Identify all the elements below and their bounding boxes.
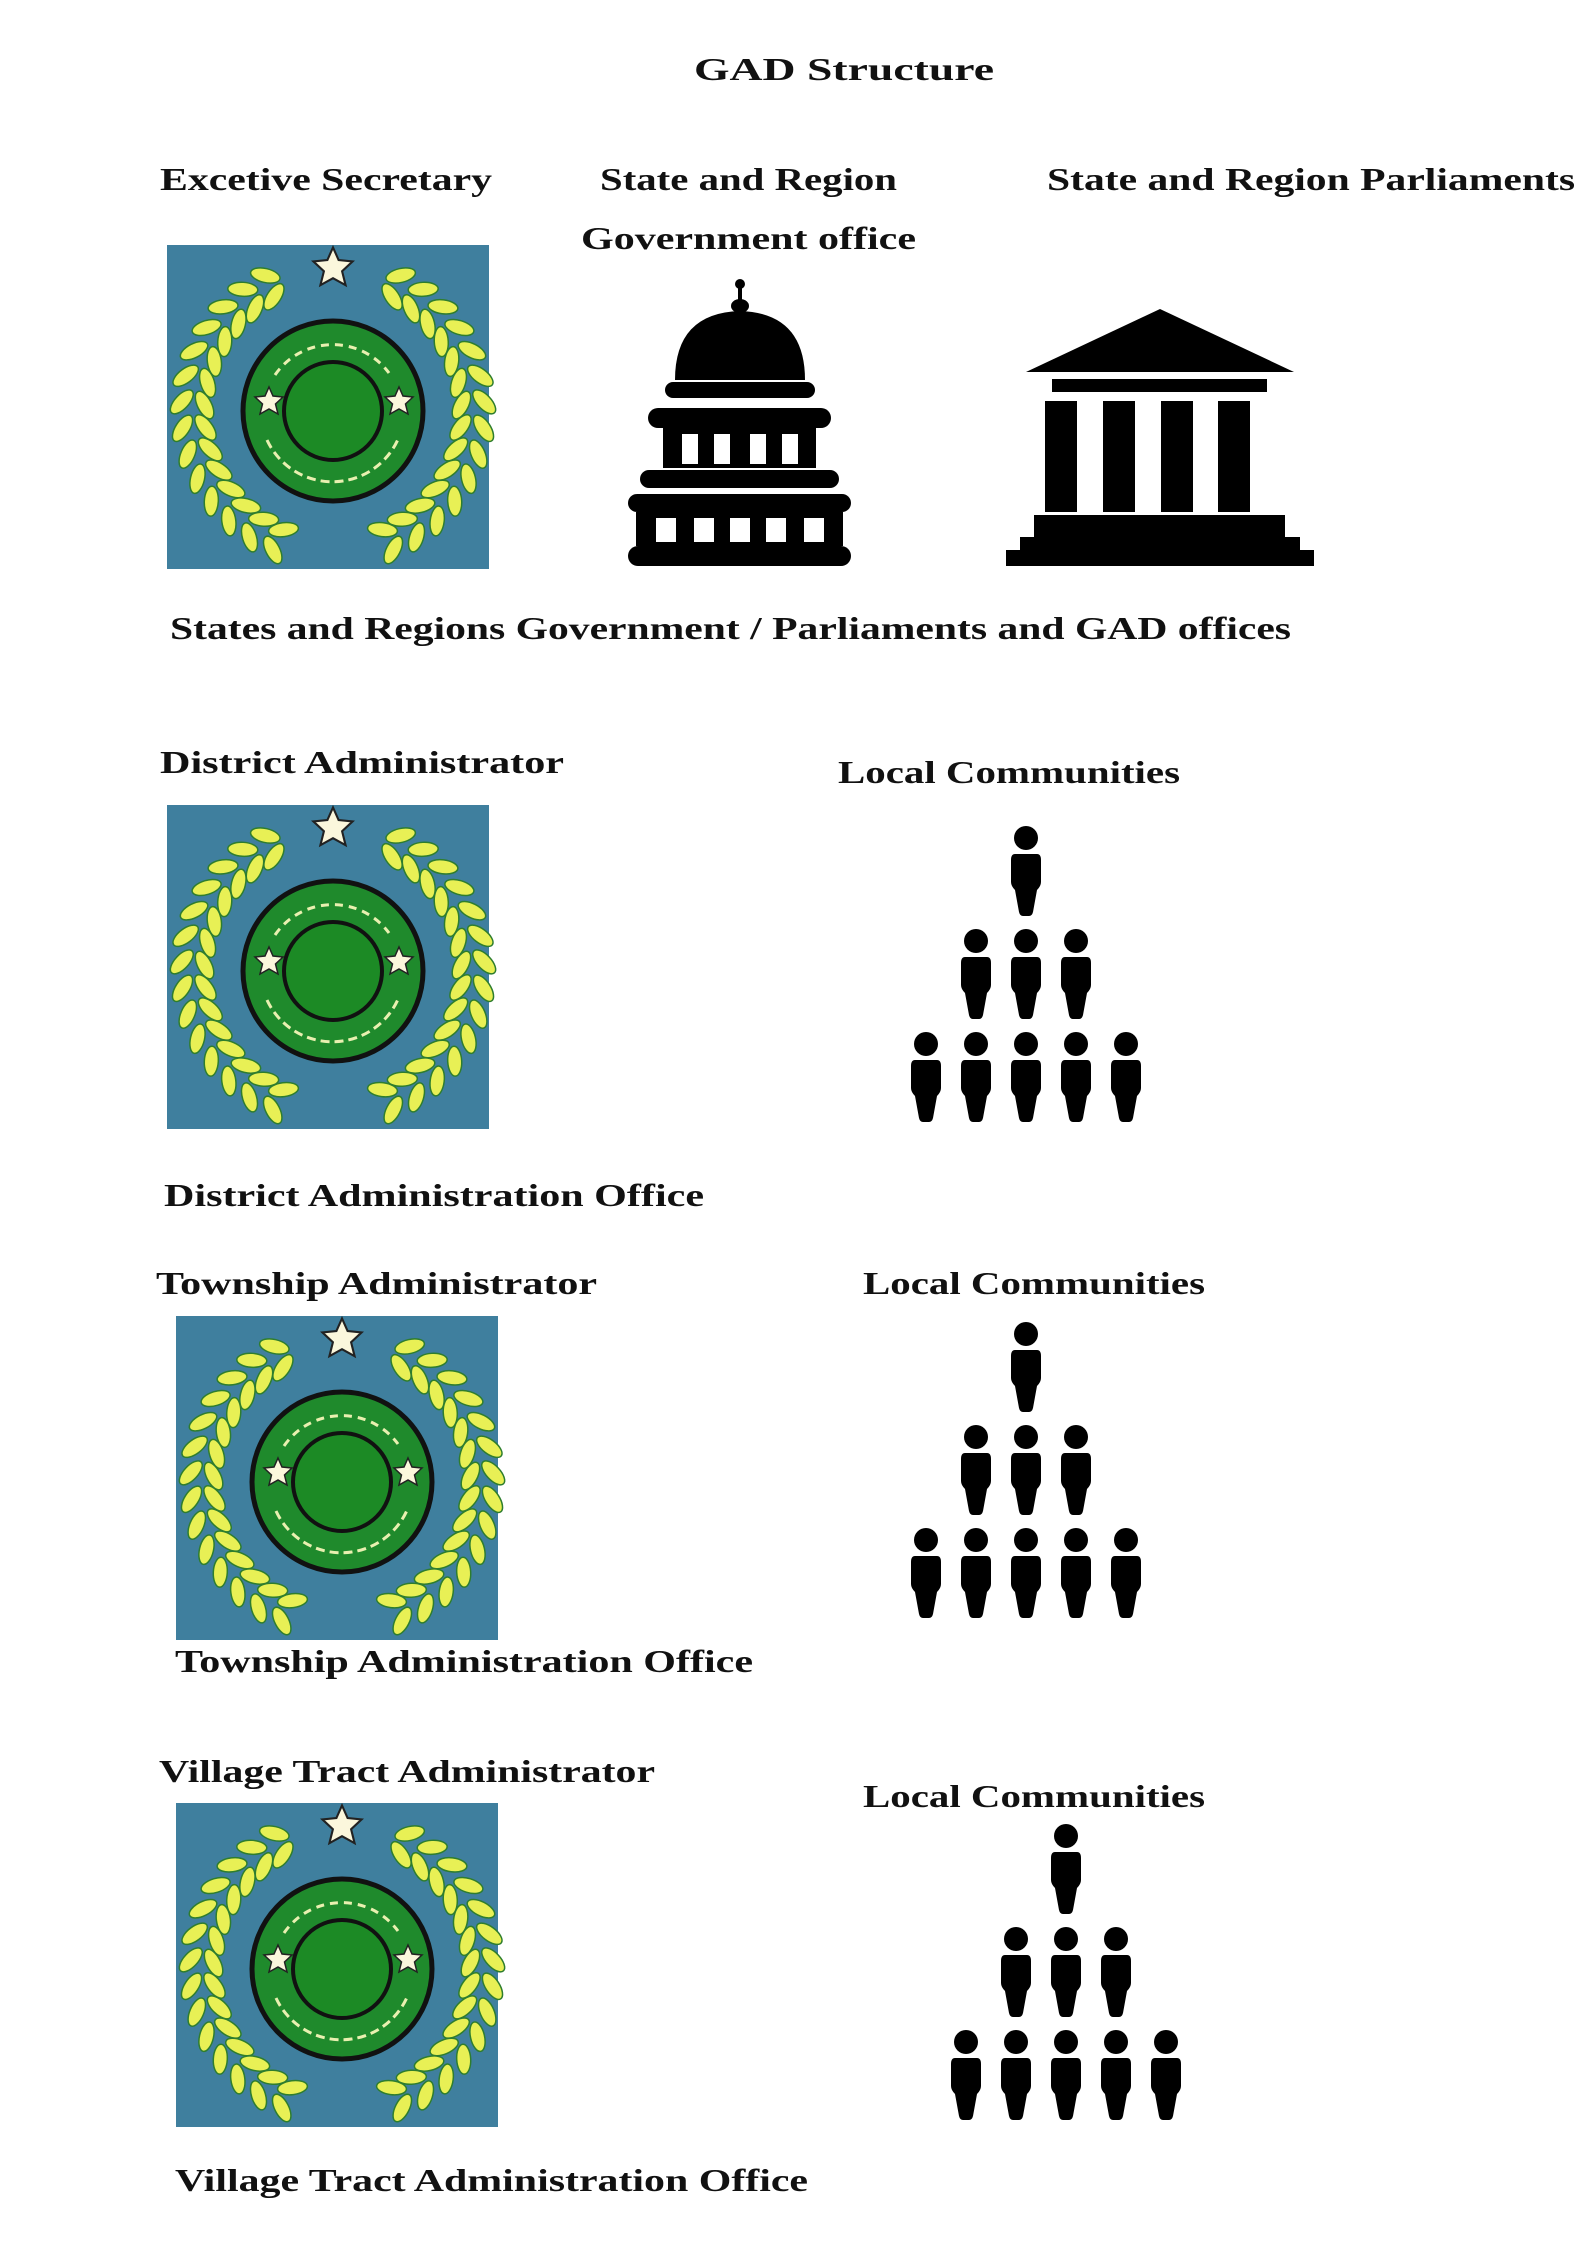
heading: District Administrator: District Administrator [160, 744, 564, 780]
icon: people pyramid 2 [911, 1322, 1141, 1618]
heading: Local Communities 1: Local Communities [838, 754, 1180, 790]
label: Village Tract Administration Office: Village Tract Administration Office [175, 2162, 808, 2198]
heading: Local Communities 3: Local Communities [863, 1778, 1205, 1814]
heading: State and Region Government office [581, 161, 916, 256]
heading: State and Region Government office: State and Region [600, 161, 897, 197]
icon: parliament temple [1006, 309, 1314, 566]
heading: Township Administrator: Township Administrator [156, 1265, 597, 1301]
heading: State and Region Government office: Government office [581, 220, 916, 256]
heading: State and Region Parliaments: State and Region Parliaments [1047, 161, 1575, 197]
label: District Administration Office: District Administration Office [164, 1177, 704, 1213]
emblem: executive secretary [165, 245, 501, 570]
heading: Excetive Secretary: Excetive Secretary [160, 161, 492, 197]
heading: Local Communities 2: Local Communities [863, 1265, 1205, 1301]
heading: Village Tract Administrator: Village Tract Administrator [159, 1753, 655, 1789]
subheading: States and Regions: States and Regions Government / Parliaments and GAD offices [170, 610, 1291, 646]
emblem: village tract [174, 1803, 510, 2128]
icon: people pyramid 3 [951, 1824, 1181, 2120]
title: GAD Structure [694, 51, 994, 87]
icon: people pyramid 1 [911, 826, 1141, 1122]
emblem: township [174, 1316, 510, 1641]
icon: capitol building [628, 279, 851, 566]
label: Township Administration Office: Township Administration Office [175, 1643, 753, 1679]
emblem: district [165, 805, 501, 1130]
